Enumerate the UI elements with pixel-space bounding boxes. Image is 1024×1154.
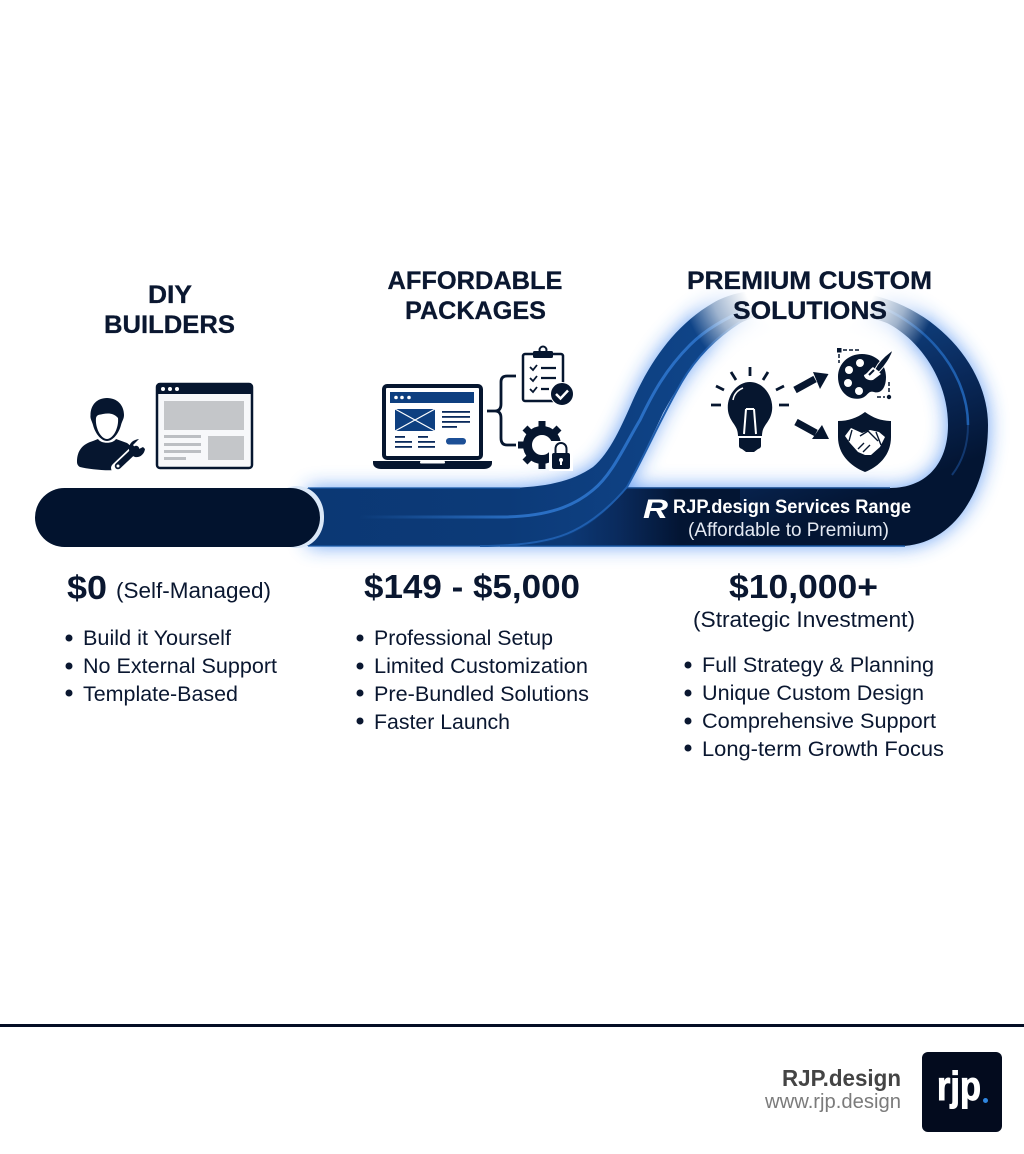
feature list: DIY: No External Support	[83, 654, 277, 678]
heading: premium custom solutions: PREMIUM CUSTOM	[687, 267, 932, 295]
ribbon logo mark: R	[643, 494, 669, 524]
icon: connecting brace	[487, 376, 516, 445]
heading: DIY builders: DIY	[148, 281, 192, 309]
arrow: bulb to palette	[795, 372, 828, 390]
feature list: premium custom: Comprehensive Support	[702, 709, 936, 733]
ribbon caption bar	[510, 488, 740, 546]
feature list: premium custom	[684, 653, 944, 761]
heading: DIY builders	[104, 281, 235, 339]
footer brand text	[764, 1065, 901, 1113]
ribbon: service range path	[300, 136, 988, 546]
heading: premium custom solutions	[687, 267, 932, 325]
footer brand text: www.rjp.design	[764, 1091, 901, 1113]
feature list: premium custom: Full Strategy & Planning	[702, 653, 934, 677]
arrow: bulb to shield	[796, 422, 829, 439]
icon: light bulb	[711, 367, 789, 452]
footer logo	[922, 1052, 1002, 1132]
heading: affordable packages: PACKAGES	[405, 297, 546, 325]
icon: website template window	[157, 384, 252, 468]
icon: shield with handshake	[838, 412, 891, 472]
price: DIY: $0	[67, 569, 107, 606]
heading: DIY builders: BUILDERS	[104, 311, 235, 339]
feature list: DIY: Build it Yourself	[83, 626, 231, 650]
footer brand text: RJP.design	[782, 1065, 901, 1091]
heading: affordable packages	[388, 267, 562, 325]
feature list: DIY: Template-Based	[83, 682, 238, 706]
feature list: premium custom: Unique Custom Design	[702, 681, 924, 705]
feature list: premium custom: Long-term Growth Focus	[702, 737, 944, 761]
feature list: affordable packages: Pre-Bundled Solutions	[374, 682, 589, 706]
rising swoosh	[300, 290, 800, 546]
ribbon fade behind heading	[678, 136, 942, 400]
icon: gear with padlock	[518, 421, 573, 471]
price: affordable packages: $149 - $5,000	[364, 568, 580, 605]
price: DIY: (Self-Managed)	[116, 578, 271, 603]
icon: laptop with webpage	[373, 386, 492, 469]
ribbon caption: RJP.design Services Range	[673, 497, 911, 518]
starting pill bar	[35, 486, 324, 548]
ribbon caption	[673, 497, 911, 541]
heading: affordable packages: AFFORDABLE	[388, 267, 562, 295]
footer rule	[0, 1024, 1024, 1027]
feature list: DIY	[66, 626, 277, 706]
right loop	[520, 288, 988, 546]
icon: clipboard checklist	[523, 346, 574, 406]
price: premium custom: $10,000+	[729, 568, 878, 605]
feature list: affordable packages: Professional Setup	[374, 626, 553, 650]
feature list: affordable packages: Limited Customization	[374, 654, 588, 678]
heading: premium custom solutions: SOLUTIONS	[733, 297, 887, 325]
icon: palette and brush	[837, 348, 893, 399]
feature list: affordable packages	[356, 626, 589, 734]
price: premium custom	[693, 568, 915, 632]
price: DIY	[67, 569, 271, 606]
feature list: affordable packages: Faster Launch	[374, 710, 510, 734]
ribbon caption: (Affordable to Premium)	[688, 520, 889, 541]
price: premium custom: (Strategic Investment)	[693, 607, 915, 632]
ribbon highlight stripes	[360, 308, 750, 517]
footer logo: rjp	[937, 1063, 981, 1109]
icon: person with wrench	[77, 398, 145, 470]
